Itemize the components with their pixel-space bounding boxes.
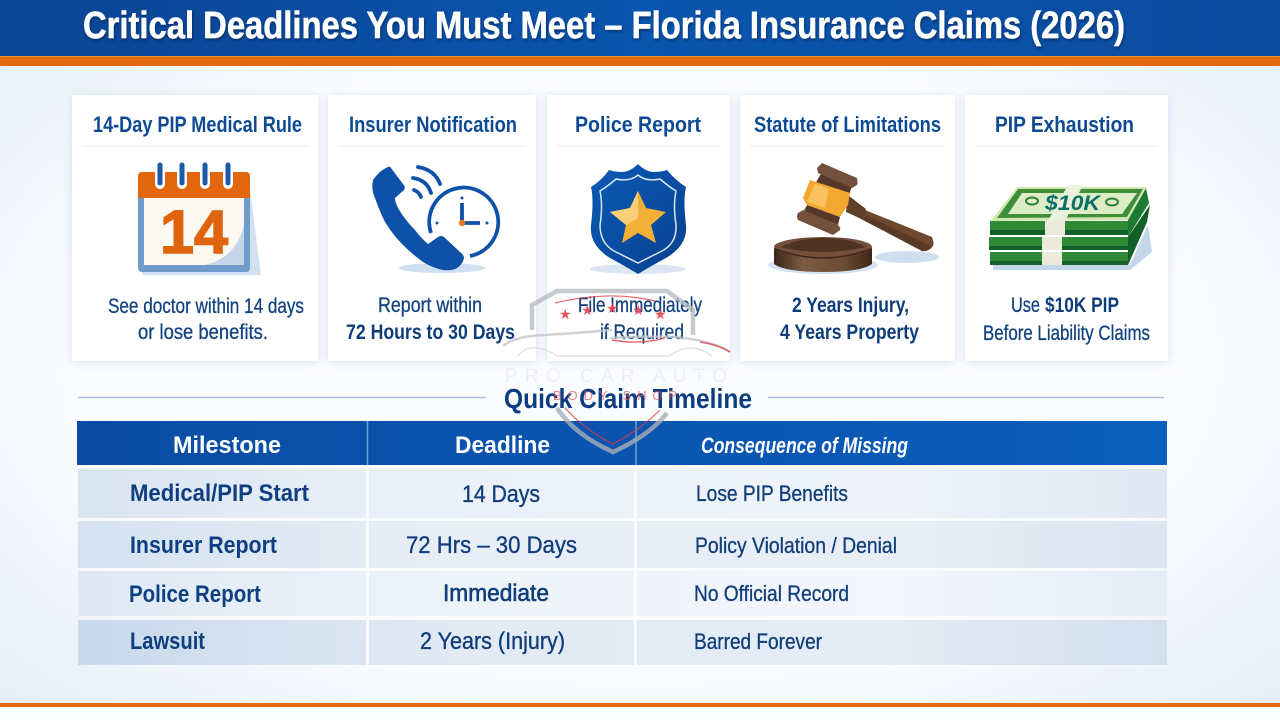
section divider: left rule	[78, 396, 486, 398]
table row: medical/PIP start: Lose PIP Benefits	[696, 481, 848, 506]
icon: police badge	[590, 164, 686, 274]
panel: 14-day PIP medical rule	[72, 95, 318, 361]
text: see doctor: or lose benefits.	[138, 321, 268, 344]
title: Critical Deadlines You Must Meet – Florida Insurance Claims (2026)	[83, 5, 1125, 47]
text: use 10K PIP: Before Liability Claims	[983, 322, 1150, 345]
icon: calendar 14: 14	[160, 198, 228, 266]
header banner	[0, 0, 1280, 66]
icon: stack of cash: $10K	[1044, 192, 1102, 215]
heading: 14-Day PIP Medical Rule: 14-Day PIP Medical Rule	[93, 112, 302, 137]
panel: PIP exhaustion	[965, 95, 1168, 361]
icon: stack of cash	[989, 185, 1152, 270]
table row: lawsuit: Lawsuit	[130, 628, 205, 655]
watermark: pro car auto body shop logo: ★	[559, 307, 572, 323]
text: use 10K PIP: Use	[1011, 294, 1040, 317]
text: years: 4 Years Property	[780, 321, 919, 344]
text: report within: 72 Hours to 30 Days	[346, 321, 515, 344]
watermark: pro car auto body shop logo: BODY SHOP	[553, 388, 677, 403]
table row: insurer report: Insurer Report	[130, 532, 277, 559]
table header row: Deadline	[455, 432, 550, 459]
text: file immediately: if Required	[600, 321, 684, 344]
panel: statute of limitations	[740, 95, 955, 361]
table row: medical/PIP start: 14 Days	[462, 481, 540, 508]
table: quick claim timeline	[77, 421, 1167, 665]
text: see doctor	[108, 295, 304, 344]
watermark: pro car auto body shop logo: PRO CAR AUTO	[505, 366, 727, 387]
watermark: pro car auto body shop logo: ★	[654, 307, 667, 323]
panel: insurer notification	[328, 95, 536, 361]
watermark: pro car auto body shop logo: ★	[581, 303, 594, 319]
table row: police report	[78, 571, 1167, 616]
table row: lawsuit: 2 Years (Injury)	[420, 628, 565, 655]
table row: medical/PIP start: Medical/PIP Start	[130, 480, 309, 507]
heading: Statute of Limitations: Statute of Limitations	[754, 112, 941, 137]
table row: insurer report	[78, 521, 1167, 568]
table row: insurer report: 72 Hrs – 30 Days	[406, 532, 577, 559]
text: see doctor: See doctor within 14 days	[108, 295, 304, 318]
text: years	[780, 294, 919, 344]
heading: Quick Claim Timeline: Quick Claim Timeline	[504, 383, 752, 414]
table row: police report: No Official Record	[694, 581, 849, 606]
bottom orange rule	[0, 703, 1280, 707]
text: report within	[346, 294, 515, 344]
table header row: Milestone	[173, 432, 281, 459]
panel: police report	[547, 95, 730, 361]
text: file immediately	[578, 294, 702, 344]
heading: PIP Exhaustion: PIP Exhaustion	[995, 112, 1134, 137]
heading: Police Report: Police Report	[575, 112, 702, 137]
text: use 10K PIP	[983, 294, 1150, 345]
icon: gavel	[768, 163, 939, 274]
table row: insurer report: Policy Violation / Denial	[695, 533, 897, 558]
text: use 10K PIP: $10K PIP	[1045, 294, 1119, 317]
table header row	[77, 421, 1167, 465]
text: file immediately: File Immediately	[578, 294, 702, 317]
table row: medical/PIP start	[78, 469, 1167, 518]
watermark: pro car auto body shop logo: ★	[606, 301, 619, 317]
table row: lawsuit: Barred Forever	[694, 629, 822, 654]
table row: lawsuit	[78, 620, 1167, 665]
table row: police report: Immediate	[443, 580, 549, 607]
table row: police report: Police Report	[129, 581, 261, 608]
text: report within: Report within	[378, 294, 482, 317]
icon: calendar 14	[138, 165, 261, 275]
section divider: right rule	[768, 396, 1164, 398]
text: years: 2 Years Injury,	[792, 294, 909, 317]
watermark: pro car auto body shop logo	[503, 291, 730, 452]
heading: Insurer Notification: Insurer Notification	[349, 112, 517, 137]
icon: phone and clock	[372, 167, 498, 273]
table header row: Consequence of Missing	[701, 433, 908, 458]
bottom white strip	[0, 707, 1280, 720]
watermark: pro car auto body shop logo: ★	[632, 303, 645, 319]
